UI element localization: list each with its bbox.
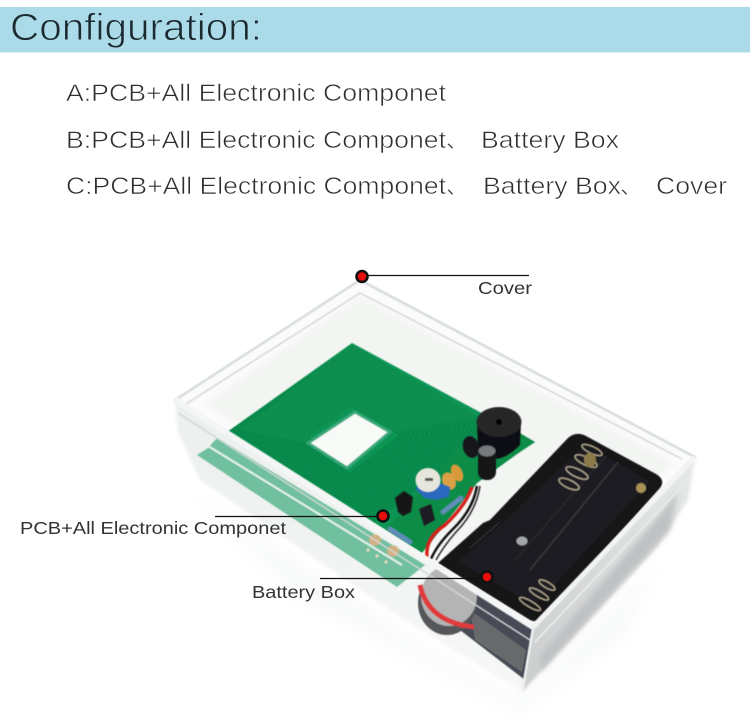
option C: 、	[446, 174, 468, 199]
wires	[427, 487, 472, 557]
option C: Cover	[656, 173, 727, 200]
resistors	[443, 498, 461, 512]
option B	[66, 127, 619, 154]
electronic components	[390, 407, 522, 560]
option C: Battery Box	[483, 173, 621, 200]
PCB soft upper sheen	[240, 343, 487, 443]
option C: C:PCB+All Electronic Componet	[66, 173, 446, 200]
buzzer	[476, 407, 522, 459]
option B: B:PCB+All Electronic Componet	[66, 127, 446, 154]
option C: 、	[620, 174, 642, 199]
PCB reflection in front wall	[197, 438, 425, 587]
callout: PCB	[20, 510, 388, 538]
option B: 、	[446, 128, 468, 153]
PCB centre window	[308, 412, 390, 468]
title: Configuration:	[10, 7, 262, 49]
trimmer potentiometer	[415, 468, 450, 500]
PCB coil traces	[230, 346, 478, 522]
option A: A:PCB+All Electronic Componet	[66, 80, 446, 107]
battery holder	[438, 434, 662, 621]
option C	[66, 173, 727, 200]
option B: Battery Box	[481, 127, 619, 154]
reflection of battery box and coil	[418, 566, 533, 680]
transistor top	[460, 434, 482, 460]
callout: cover	[356, 271, 532, 298]
case rims	[175, 280, 695, 692]
right wall reflection	[540, 490, 678, 672]
coil reflection	[418, 566, 477, 635]
battery springs	[518, 442, 603, 613]
case shadow	[190, 490, 660, 712]
case floor	[175, 280, 695, 627]
callout: battery box: Battery Box	[252, 582, 355, 602]
case front wall	[175, 400, 533, 692]
PCB board	[227, 343, 535, 553]
header band	[0, 7, 750, 52]
PCB component area	[385, 420, 535, 553]
callout: battery box	[252, 572, 492, 602]
case right wall	[522, 457, 695, 692]
callout: cover: Cover	[478, 278, 532, 298]
option list	[66, 80, 727, 200]
battery contacts	[636, 483, 646, 493]
product photo: transparent case with PCB and battery box	[175, 280, 695, 712]
capacitor	[478, 446, 496, 480]
callout: PCB: PCB+All Electronic Componet	[20, 518, 286, 538]
transistor and IC	[395, 491, 413, 516]
ceramic capacitors	[448, 463, 466, 483]
